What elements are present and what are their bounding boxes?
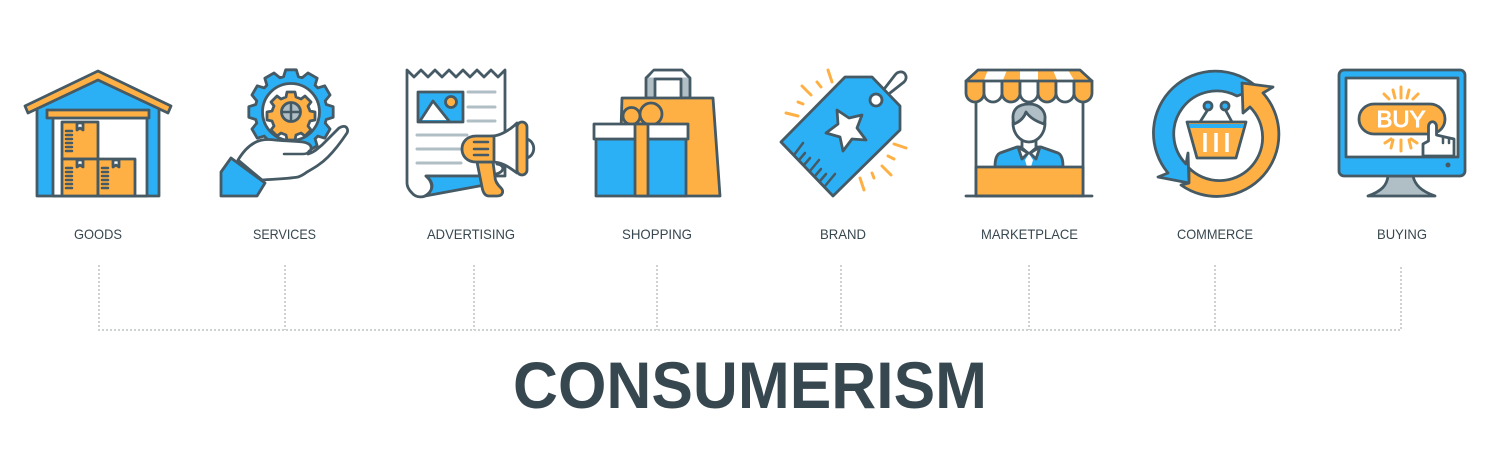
icon: marketplace stall with vendor	[966, 70, 1093, 196]
connector bracket	[99, 265, 1401, 330]
icon: services hand with gear	[221, 70, 348, 196]
icon: advertising newspaper with megaphone	[407, 70, 534, 197]
label: commerce: COMMERCE	[1177, 226, 1253, 242]
icon: goods warehouse	[25, 71, 171, 196]
label: services: SERVICES	[253, 226, 316, 242]
label: shopping: SHOPPING	[622, 226, 692, 242]
label: advertising: ADVERTISING	[427, 226, 515, 242]
icon: brand price tag	[781, 70, 906, 196]
label: brand: BRAND	[820, 226, 866, 242]
label: marketplace: MARKETPLACE	[981, 226, 1078, 242]
icon: shopping bag and gift	[594, 70, 720, 196]
icon: commerce arrows with basket	[1153, 71, 1279, 196]
label: buying: BUYING	[1377, 226, 1427, 242]
label: goods: GOODS	[74, 226, 122, 242]
title: CONSUMERISM	[513, 348, 987, 422]
icon: buying monitor with buy button: BUY	[1376, 106, 1426, 132]
icon: buying monitor with buy button	[1339, 70, 1465, 196]
